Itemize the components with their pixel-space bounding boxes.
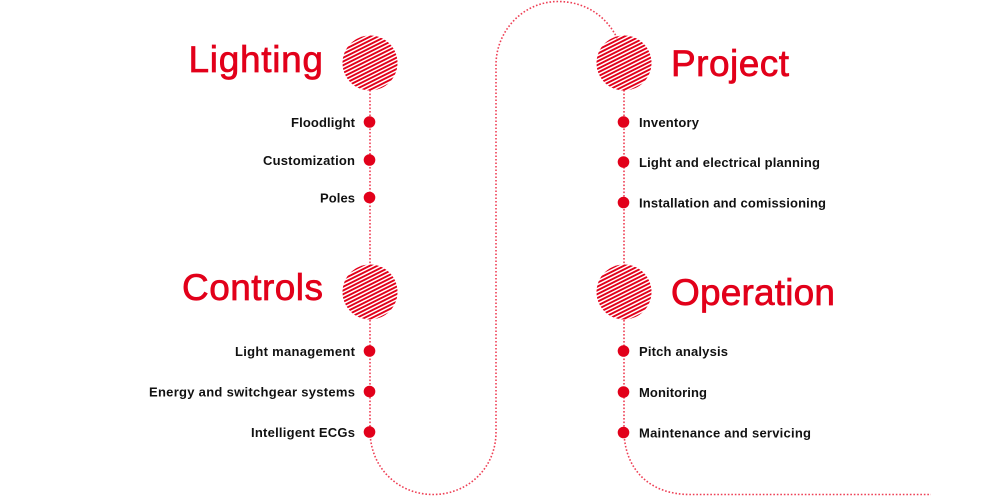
item: Floodlight: Floodlight xyxy=(291,115,356,130)
item: Installation and comissioning: Installation and comissioning xyxy=(639,196,826,210)
item: Inventory: Inventory xyxy=(639,115,700,130)
icon: hatched circle Operation xyxy=(610,264,638,320)
heading: Controls: Controls xyxy=(182,267,323,308)
item: Monitoring: Monitoring xyxy=(639,385,707,400)
connector: dotted path from Lighting through Project xyxy=(370,2,618,494)
section: Project xyxy=(610,35,826,210)
item: Light and electrical planning: Light and electrical planning xyxy=(639,155,820,170)
item: Intelligent ECGs: Intelligent ECGs xyxy=(251,425,355,440)
heading: Project: Project xyxy=(671,43,790,84)
heading: Operation: Operation xyxy=(671,272,835,313)
item: Poles: Poles xyxy=(320,190,355,206)
item: Energy and switchgear systems: Energy and switchgear systems xyxy=(149,384,355,400)
item: Customization: Customization xyxy=(263,153,355,168)
item: Maintenance and servicing: Maintenance and servicing xyxy=(639,426,811,440)
section: Controls xyxy=(149,264,384,440)
section: Operation xyxy=(610,264,835,440)
icon: hatched circle Project xyxy=(610,35,638,91)
icon: hatched circle Lighting xyxy=(356,35,384,91)
item: Poles xyxy=(320,190,375,206)
section: Lighting xyxy=(188,35,384,206)
connector: dotted path from Project through Operation xyxy=(624,90,931,494)
item: Light management: Light management xyxy=(235,344,356,359)
icon: hatched circle Controls xyxy=(356,264,384,320)
heading: Lighting: Lighting xyxy=(188,39,323,80)
item: Pitch analysis: Pitch analysis xyxy=(639,344,728,359)
